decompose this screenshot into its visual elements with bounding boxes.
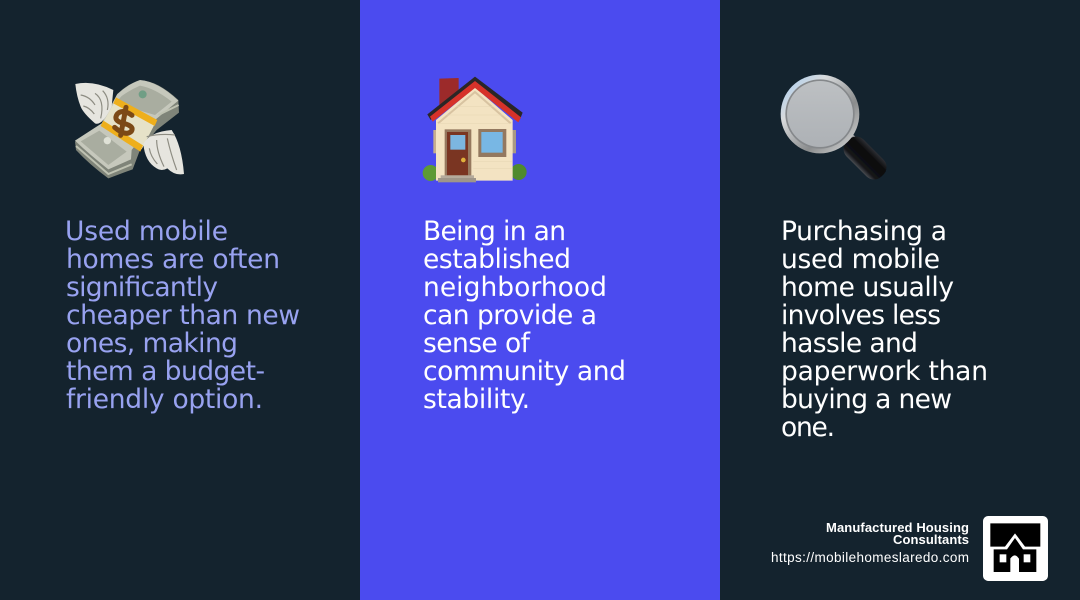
footer: company name and url: https://mobilehomeslaredo.com — [771, 550, 969, 565]
text: savings benefit — [65, 216, 300, 415]
text: less paperwork benefit: one. — [781, 412, 835, 443]
text: less paperwork benefit: paperwork than — [781, 356, 988, 387]
icon: money with wings — [75, 80, 184, 178]
icon: magnifying glass — [781, 75, 891, 184]
panel: center background — [360, 0, 720, 600]
text: community benefit: established — [423, 244, 571, 275]
icon: house — [423, 77, 527, 182]
text: community benefit: sense of — [423, 328, 531, 359]
text: savings benefit: friendly option. — [66, 384, 263, 415]
logo — [983, 516, 1048, 581]
text: savings benefit: them a budget- — [66, 356, 265, 387]
text: savings benefit: cheaper than new — [66, 300, 300, 331]
text: less paperwork benefit: hassle and — [781, 328, 918, 359]
text: savings benefit: Used mobile — [65, 216, 228, 247]
text: savings benefit: homes are often — [66, 244, 280, 275]
footer: company name and url: Manufactured Housing — [826, 520, 969, 535]
text: less paperwork benefit: buying a new — [781, 384, 952, 415]
text: community benefit: can provide a — [423, 300, 597, 331]
panel: left background — [0, 0, 360, 600]
text: less paperwork benefit: used mobile — [781, 244, 940, 275]
text: community benefit — [423, 216, 626, 415]
text: savings benefit: ones, making — [66, 328, 238, 359]
panel: right background — [720, 0, 1080, 600]
text: less paperwork benefit: home usually — [781, 272, 954, 303]
text: community benefit: community and — [423, 356, 626, 387]
footer: company name and url: Consultants — [893, 532, 969, 547]
text: less paperwork benefit: Purchasing a — [781, 216, 947, 247]
text: community benefit: Being in an — [423, 216, 566, 247]
footer: company name and url — [771, 520, 969, 565]
text: less paperwork benefit — [781, 216, 988, 443]
text: community benefit: stability. — [423, 384, 530, 415]
text: savings benefit: significantly — [66, 272, 218, 303]
text: community benefit: neighborhood — [423, 272, 607, 303]
text: less paperwork benefit: involves less — [781, 300, 941, 331]
